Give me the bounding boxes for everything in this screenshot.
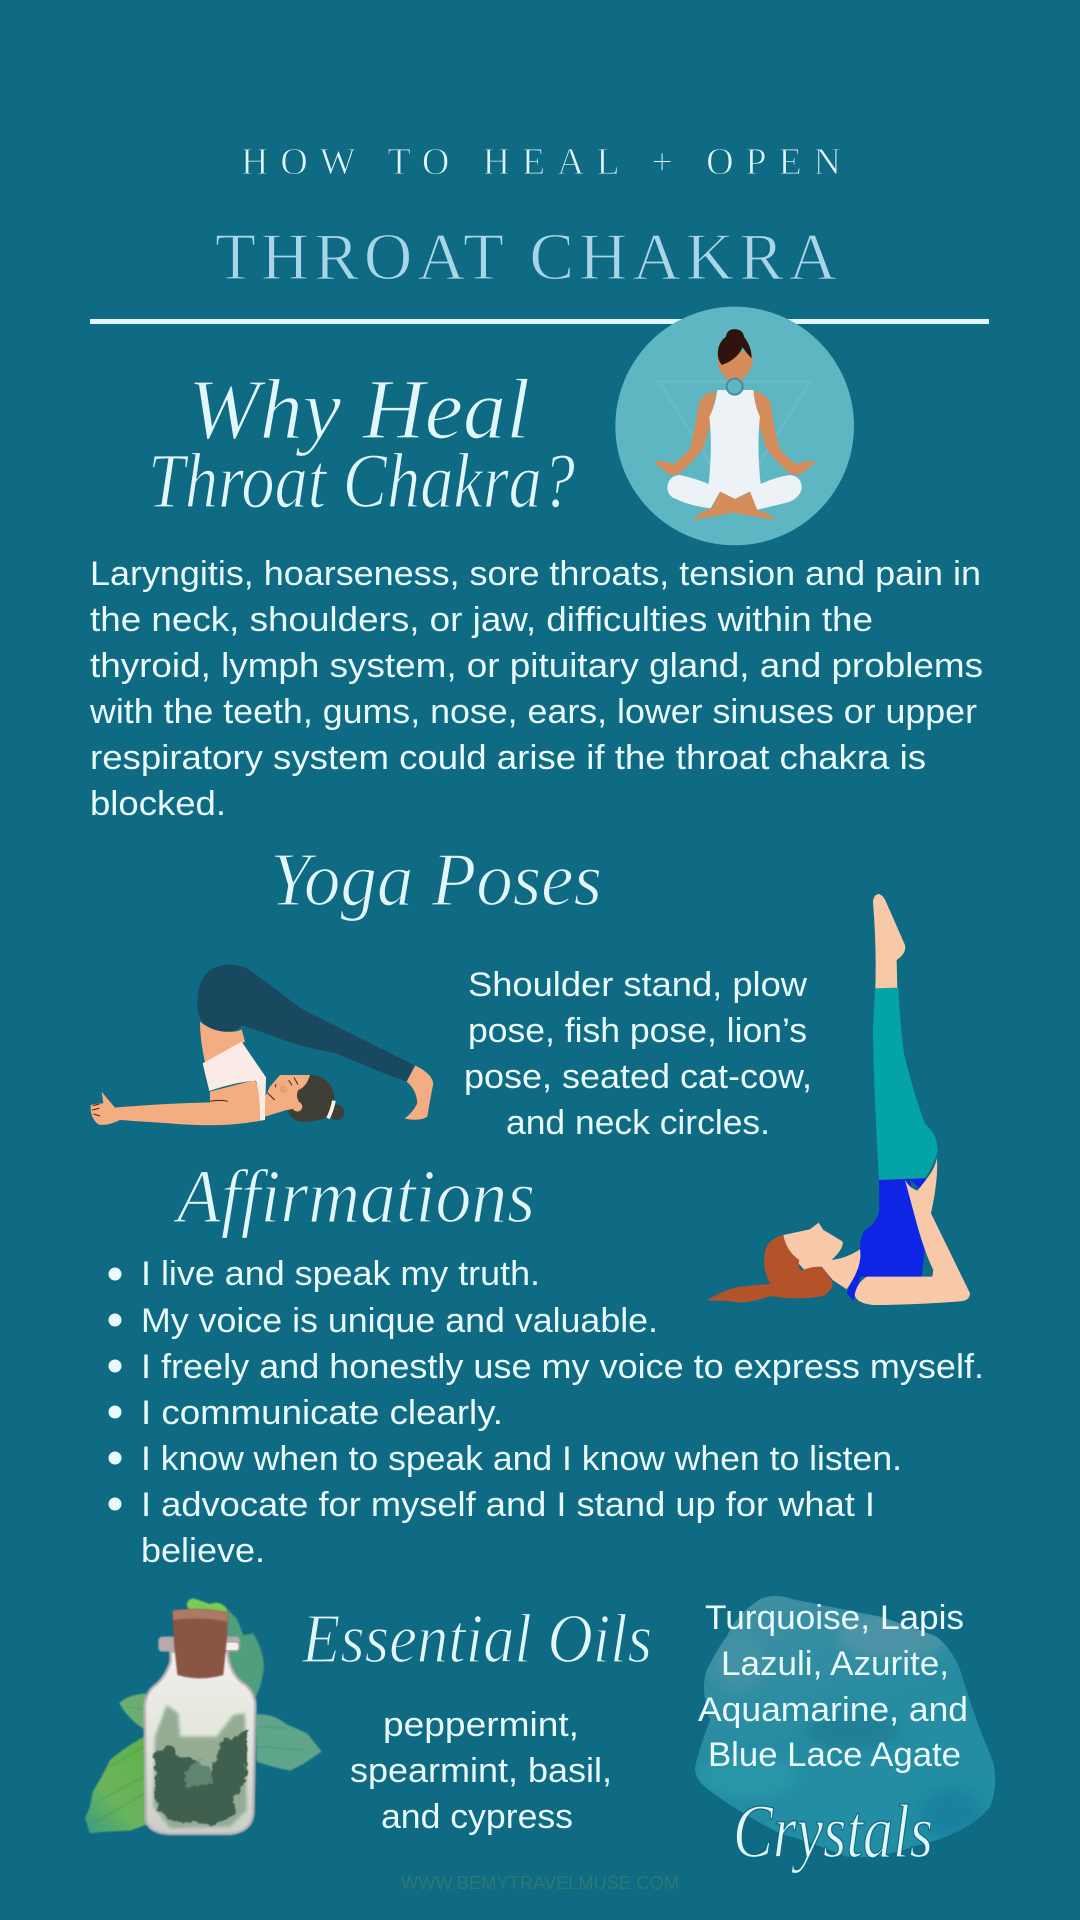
foot [405,1066,433,1120]
text block: why heal: thyroid, lymph system, or pituitary gland, and problems [90,647,983,685]
icon: meditating figure with throat chakra [615,307,854,545]
arm and shoulder [91,1080,263,1125]
herbs [153,1705,247,1828]
feet [693,492,777,520]
leaves [85,1599,322,1833]
illustration: shoulder stand pose [707,894,970,1305]
head [265,1075,312,1117]
text block: why heal: the neck, shoulders, or jaw, difficulties within the [90,601,873,639]
text block: crystals list: Lazuli, Azurite, [721,1645,949,1683]
text block: why heal: Laryngitis, hoarseness, sore throats, tension and pain in [90,555,981,593]
text block: yoga poses list: pose, seated cat-cow, [464,1058,812,1096]
facial lines [92,1077,298,1116]
list: affirmations: I know when to speak and I know when to listen. [141,1440,902,1478]
text block: crystals list: Aquamarine, and [698,1691,968,1729]
illustration: crystal watercolor blob [695,1596,996,1858]
throat ring [727,379,743,395]
hair [718,329,752,365]
divider line [90,319,989,324]
illustration: essential oil bottle with leaves [85,1599,322,1834]
neck and face [718,350,753,390]
lower back [200,1022,245,1063]
text block: yoga poses list: pose, fish pose, lion’s [468,1012,807,1050]
text block: yoga poses list: and neck circles. [506,1104,770,1142]
heading: affirmations: Affirmations [172,1155,535,1239]
leggings [873,988,938,1180]
bottle body [145,1652,255,1834]
text block: yoga poses list [464,966,812,1142]
text block: essential oils list [350,1706,612,1836]
heading: crystals: Crystals [733,1790,933,1874]
text block: essential oils list: spearmint, basil, [350,1752,612,1790]
text block: crystals list [698,1599,968,1774]
title: throat chakra: THROAT CHAKRA [215,220,837,294]
list: affirmations: believe. [141,1532,265,1570]
list: affirmations: My voice is unique and valuable. [141,1302,658,1340]
legs [197,965,414,1082]
head and neck [783,1223,860,1289]
text block: essential oils list: peppermint, [383,1706,579,1744]
text block: why heal [89,555,983,823]
heading: yoga poses: Yoga Poses [270,838,602,922]
hair [707,1235,833,1303]
illustration: plow pose [91,965,433,1125]
arm [855,1158,970,1305]
hair [288,1075,334,1122]
text block: why heal: with the teeth, gums, nose, ears, lower sinuses or upper [89,693,977,731]
list: affirmations: I live and speak my truth. [141,1255,540,1293]
tank top [709,390,761,484]
list: affirmations: I advocate for myself and I stand up for what I [141,1486,875,1524]
bottle lip [158,1637,240,1652]
skin: arms [654,391,716,475]
text block: why heal: blocked. [90,785,226,823]
text block: why heal: respiratory system could arise if the throat chakra is [90,739,926,777]
tank [847,1178,926,1301]
upper leg and foot [873,894,905,989]
heading: why heal throat chakra [148,361,575,524]
list: affirmations: I freely and honestly use my voice to express myself. [141,1348,984,1386]
heading: why heal throat chakra: Why Heal [188,361,530,457]
top [203,1042,266,1121]
list: affirmations: I communicate clearly. [141,1394,503,1432]
text block: essential oils list: and cypress [381,1798,573,1836]
heading: why heal throat chakra: Throat Chakra? [148,437,575,524]
text block: crystals list: Turquoise, Lapis [705,1599,964,1637]
legs [667,475,802,510]
title: how to heal + open: HOW TO HEAL + OPEN [241,141,841,183]
footer: website: WWW.BEMYTRAVELMUSE.COM [401,1873,679,1893]
cork [173,1609,228,1678]
heading: essential oils: Essential Oils [301,1601,652,1678]
text block: crystals list: Blue Lace Agate [708,1736,961,1774]
text block: yoga poses list: Shoulder stand, plow [468,966,807,1004]
list: affirmations [108,1255,984,1570]
